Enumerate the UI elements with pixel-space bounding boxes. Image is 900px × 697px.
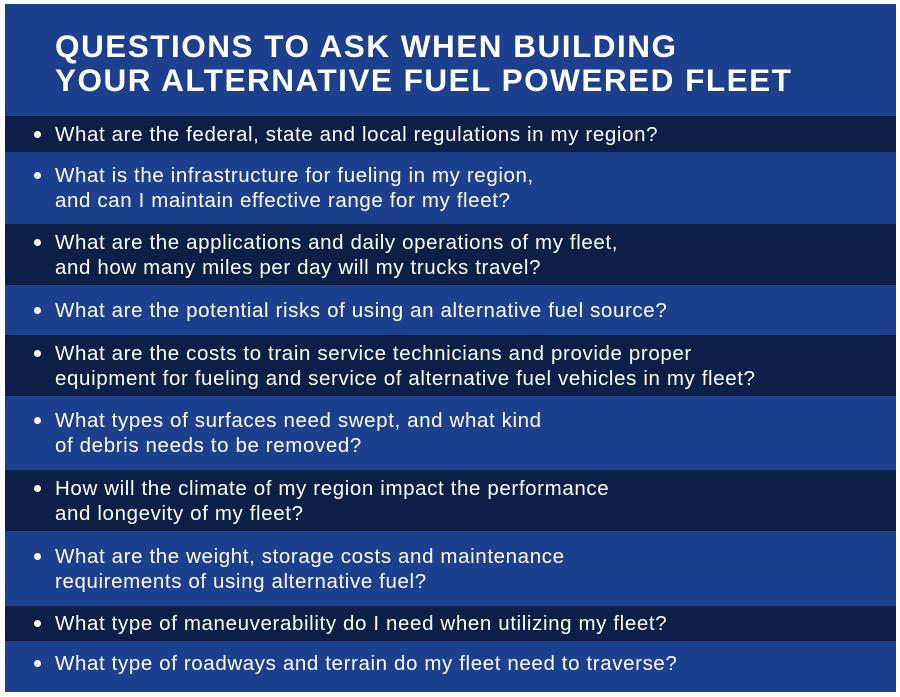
row 9: What type of maneuverability do I need when utilizing my fleet? [55, 612, 667, 635]
row 7: and longevity of my fleet? [55, 502, 304, 524]
row 2 [34, 164, 534, 212]
row 1 [5, 116, 896, 152]
title [55, 28, 792, 98]
row 8 [34, 544, 565, 592]
row 6: of debris needs to be removed? [55, 434, 362, 457]
row 2: and can I maintain effective range for my fleet? [55, 189, 511, 212]
row 6: What types of surfaces need swept, and what kind [55, 409, 542, 432]
row 5: What are the costs to train service technicians and provide proper [55, 342, 692, 364]
row 1: What are the federal, state and local regulations in my region? [55, 122, 658, 146]
row 8: requirements of using alternative fuel? [55, 570, 427, 592]
row 3: and how many miles per day will my trucks travel? [55, 256, 541, 278]
row 5 [5, 335, 896, 396]
row 3: What are the applications and daily operations of my fleet, [55, 230, 618, 254]
row 7 [5, 470, 896, 531]
row 10: What type of roadways and terrain do my fleet need to traverse? [55, 652, 677, 675]
row 8: What are the weight, storage costs and maintenance [55, 544, 565, 568]
row 5: equipment for fueling and service of alternative fuel vehicles in my fleet? [55, 366, 756, 390]
row 4: What are the potential risks of using an alternative fuel source? [55, 298, 667, 322]
row 7: How will the climate of my region impact the performance [55, 476, 609, 500]
row 3 [5, 224, 896, 285]
row 2: What is the infrastructure for fueling in my region, [55, 164, 534, 187]
row 6 [34, 409, 542, 457]
title: QUESTIONS TO ASK WHEN BUILDING [55, 28, 678, 64]
row 9 [5, 606, 896, 641]
title: YOUR ALTERNATIVE FUEL POWERED FLEET [55, 62, 792, 98]
